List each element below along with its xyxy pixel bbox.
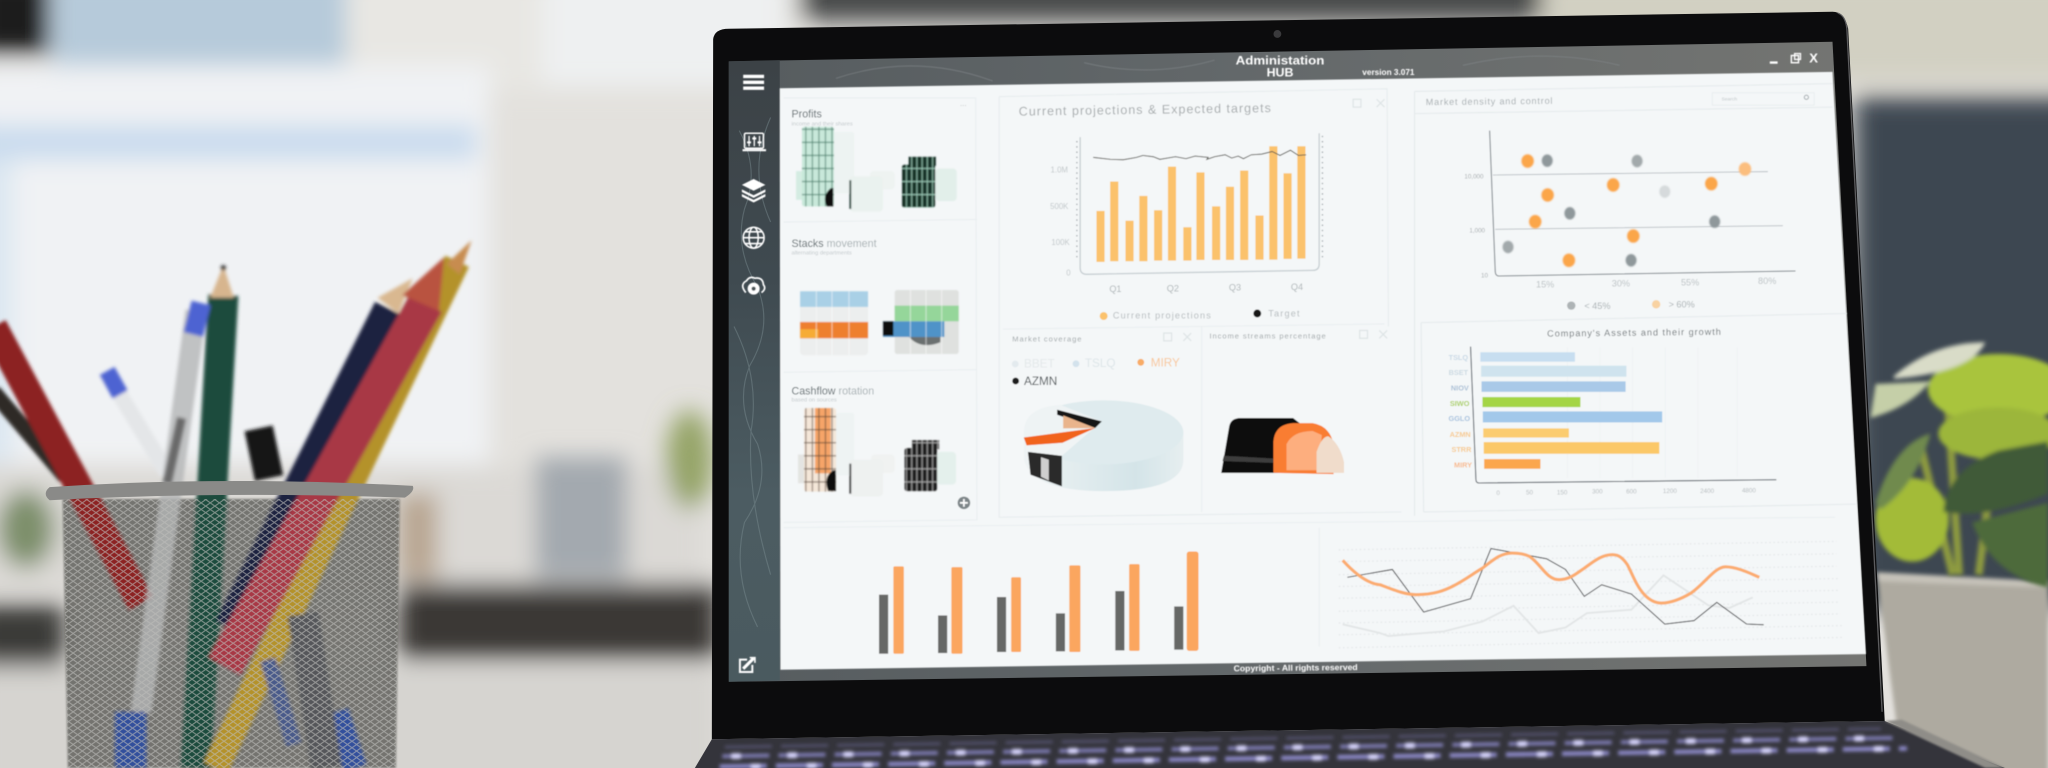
- market coverage heading: Market coverage: [1012, 335, 1081, 344]
- app title: HUB: [1267, 65, 1293, 79]
- window controls: X: [1809, 51, 1818, 66]
- assets tick labels: 0: [1496, 490, 1500, 497]
- bottom paired bar chart: [784, 517, 1835, 654]
- app title: Administation: [1236, 54, 1324, 68]
- stacks subtext: alternating departments: [792, 251, 852, 257]
- cashflow heading: Cashflow rotation: [792, 385, 874, 397]
- assets heading: Company's Assets and their growth: [1547, 327, 1721, 339]
- income streams heading: Income streams percentage: [1209, 331, 1326, 340]
- y axis labels: [1050, 165, 1071, 278]
- panel: projections bar chart: [999, 89, 1401, 517]
- panel: market coverage: [1003, 324, 1387, 512]
- icon: globe: [743, 227, 764, 248]
- quarter labels: Q2: [1167, 283, 1179, 293]
- assets tick labels: 50: [1526, 489, 1533, 496]
- assets tick labels: 4800: [1742, 487, 1756, 494]
- scatter x labels: [1536, 276, 1776, 289]
- cup back wall: [63, 499, 400, 768]
- assets labels: SIWO: [1450, 399, 1470, 408]
- icon: equalizer laptop: [743, 133, 766, 150]
- assets tick labels: 300: [1592, 489, 1603, 496]
- stacks heading: Stacks movement: [792, 238, 877, 250]
- assets labels: NIOV: [1451, 384, 1469, 393]
- icon: add button: [958, 497, 970, 509]
- assets labels: GGLO: [1449, 414, 1470, 423]
- clear pen short: [107, 371, 167, 473]
- icon: menu: [743, 76, 764, 88]
- panel: company assets horizontal bars: [1421, 313, 1856, 512]
- window controls: [1770, 51, 1818, 66]
- scatter x labels: 30%: [1612, 279, 1630, 289]
- scatter x labels: 15%: [1536, 279, 1554, 289]
- orange dots: [1521, 154, 1751, 267]
- assets tick labels: 150: [1557, 489, 1568, 496]
- orange series: [1343, 553, 1759, 603]
- cup mesh: [63, 499, 400, 768]
- assets tick labels: 1200: [1663, 488, 1677, 495]
- version label: version 3.071: [1362, 67, 1415, 77]
- clear pen tall: [141, 303, 201, 712]
- scatter heading: Market density and control: [1426, 96, 1552, 107]
- yellow pencil: [216, 261, 457, 768]
- pie legend: BBET: [1024, 358, 1055, 371]
- scatter legend: < 45%: [1584, 301, 1610, 311]
- target line: [1093, 150, 1306, 160]
- quarter labels: Q1: [1109, 284, 1122, 294]
- income streams controls: [1360, 330, 1387, 338]
- assets tick labels: 600: [1626, 489, 1637, 496]
- navy pencil: [229, 278, 413, 627]
- assets bars: [1480, 352, 1662, 469]
- gray series: [1343, 575, 1753, 636]
- laptop screen: window bars: [729, 42, 1866, 682]
- app title: [1236, 54, 1324, 79]
- header marble veins: [836, 56, 1620, 81]
- scatter y labels: [1464, 173, 1489, 280]
- y axis labels: 100K: [1051, 238, 1070, 247]
- red pencil left: [0, 327, 141, 603]
- panel: left summary column: [784, 98, 977, 522]
- dark pencil left: [0, 392, 65, 477]
- footer copyright: Copyright - All rights reserved: [1234, 662, 1358, 673]
- profits 3D cylinders: [796, 127, 957, 212]
- 3D half-donut chart: [1221, 418, 1344, 474]
- panel: market density scatter plot: [1415, 84, 1832, 516]
- quarter labels: Q3: [1229, 283, 1241, 293]
- search box: [1712, 93, 1814, 105]
- y axis labels: 0: [1066, 269, 1071, 278]
- scatter y labels: 10,000: [1464, 173, 1484, 180]
- blue pen ends: [119, 712, 143, 768]
- profits heading: Profits: [792, 109, 822, 121]
- webcam: [1273, 30, 1281, 38]
- assets axes: [1471, 347, 1776, 483]
- assets labels: TSLQ: [1449, 353, 1468, 362]
- chart panel controls: [1353, 99, 1384, 107]
- plant pot: [1877, 572, 2048, 768]
- assets grid: [1567, 347, 1737, 478]
- cup rim: [46, 481, 413, 500]
- assets labels: AZMN: [1450, 430, 1471, 439]
- assets labels: [1449, 353, 1472, 470]
- scatter legend: > 60%: [1669, 300, 1695, 310]
- market coverage controls: [1164, 333, 1191, 341]
- assets labels: BSET: [1449, 368, 1469, 377]
- cashflow subtext: based on sources: [792, 398, 837, 404]
- sidebar icons: [740, 76, 766, 672]
- search box: Search: [1721, 97, 1737, 103]
- green pencil: [196, 265, 234, 768]
- quarter labels: [1109, 282, 1303, 294]
- chart title: Current projections & Expected targets: [1019, 101, 1271, 119]
- sidebar background: [729, 60, 780, 682]
- chart legend: Target: [1268, 309, 1300, 319]
- quarter labels: Q4: [1291, 282, 1303, 292]
- bars: [1096, 146, 1305, 262]
- black series: [1347, 549, 1764, 625]
- scatter x labels: 80%: [1758, 276, 1776, 286]
- pie legend: AZMN: [1024, 375, 1057, 388]
- gray dots: [1503, 154, 1720, 267]
- scatter x labels: 55%: [1681, 277, 1699, 287]
- red pencil right: [225, 257, 444, 666]
- bottom line chart: [1319, 528, 1843, 648]
- assets tick labels: [1496, 487, 1756, 497]
- 3D pie chart: [1024, 400, 1183, 491]
- laptop keyboard deck: [695, 720, 2005, 768]
- sidebar marble veins: [734, 118, 771, 627]
- scatter y labels: 10: [1481, 273, 1489, 280]
- stacks 3D blocks: [800, 290, 959, 355]
- plant: [1870, 342, 2048, 588]
- chart axes: [1080, 133, 1319, 274]
- pen holder with pens and pencils: [0, 240, 472, 768]
- writing tools: [0, 240, 472, 768]
- scatter legend: [1567, 300, 1695, 311]
- chart legend: [1100, 309, 1300, 321]
- cashflow 3D cylinders: [798, 408, 956, 496]
- pie legend: TSLQ: [1085, 357, 1116, 370]
- panel: left summary column: ...: [960, 99, 967, 108]
- icon: cloud gear: [743, 277, 765, 295]
- y axis labels: 1.0M: [1051, 165, 1068, 174]
- black marker: [259, 428, 269, 478]
- assets labels: MIRY: [1454, 461, 1472, 470]
- scatter axes: [1490, 131, 1796, 276]
- chart legend: Current projections: [1113, 311, 1211, 321]
- laptop lid: [712, 12, 1885, 739]
- assets labels: STRR: [1451, 445, 1472, 454]
- profits subtext: income and their shares: [792, 121, 853, 127]
- icon: layers: [742, 179, 765, 202]
- y axis labels: 500K: [1050, 202, 1069, 211]
- dashboard content area: [740, 51, 1866, 673]
- scatter y labels: 1,000: [1469, 227, 1486, 234]
- icon: edit: [740, 658, 755, 672]
- assets tick labels: 2400: [1700, 488, 1715, 495]
- pie legend: [1012, 356, 1180, 388]
- pie legend: MIRY: [1151, 356, 1180, 369]
